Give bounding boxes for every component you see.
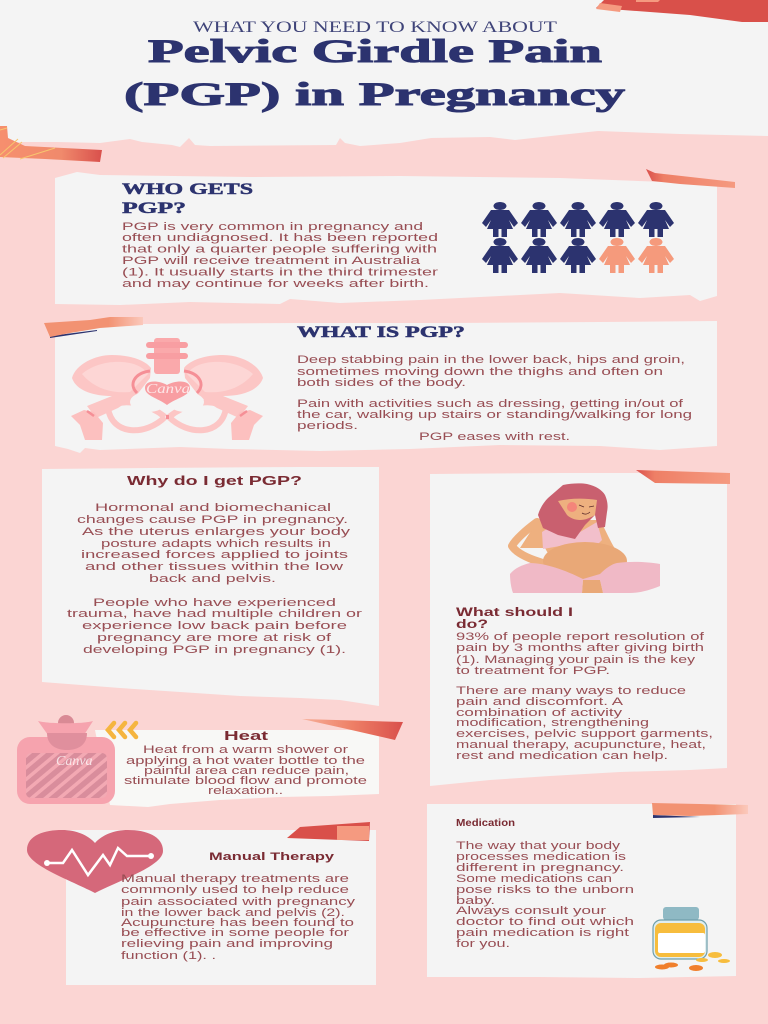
icon: heart <box>27 830 163 893</box>
tape: left <box>0 126 102 162</box>
heading: Why do I get PGP? <box>127 474 302 488</box>
text block <box>124 744 367 797</box>
text block: and may continue for weeks after birth. <box>122 278 429 290</box>
title <box>124 34 626 113</box>
text block: often undiagnosed. It has been reported <box>122 232 438 244</box>
text block: exercises, pelvic support garments, <box>456 728 713 740</box>
text block: The way that your body <box>456 840 621 852</box>
text block: commonly used to help reduce <box>121 884 349 896</box>
text block: Deep stabbing pain in the lower back, hips and groin, <box>297 354 685 366</box>
text block: painful area can reduce pain, <box>144 765 349 777</box>
heading: do? <box>456 619 488 631</box>
subtitle: WHAT YOU NEED TO KNOW ABOUT <box>193 19 557 36</box>
panel: manual therapy <box>27 822 376 985</box>
text block <box>122 221 439 290</box>
text block: pain associated with pregnancy <box>121 896 356 908</box>
heading: What should I <box>456 607 573 619</box>
text block: different in pregnancy. <box>456 862 624 874</box>
text block: stimulate blood flow and promote <box>124 775 367 787</box>
panel: what is PGP <box>44 317 717 453</box>
heading <box>122 181 253 217</box>
title: Pelvic Girdle Pain <box>148 34 602 70</box>
text block: be effective in some people for <box>121 927 350 939</box>
text block: doctor to find out which <box>456 916 634 928</box>
text block: Pain with activities such as dressing, getting in/out of <box>297 398 685 410</box>
text block: PGP eases with rest. <box>419 431 570 443</box>
text block: for you. <box>456 938 510 950</box>
text block: experience low back pain before <box>82 620 347 632</box>
text block: manual therapy, acupuncture, heat, <box>456 739 706 751</box>
tape <box>636 470 730 484</box>
tape <box>287 822 370 841</box>
heading: WHAT IS PGP? <box>297 324 465 341</box>
text block: periods. <box>297 420 358 432</box>
icon: hot water bottle <box>17 715 115 804</box>
text block: combination of activity <box>456 707 623 719</box>
heading: WHO GETS <box>122 181 253 198</box>
text block: posture adapts which results in <box>101 538 331 550</box>
text block: As the uterus enlarges your body <box>82 526 351 538</box>
text block: applying a hot water bottle to the <box>126 755 365 767</box>
heading <box>456 607 573 631</box>
text block: trauma, have had multiple children or <box>67 608 363 620</box>
icon: pill jar <box>653 907 730 971</box>
text block: developing PGP in pregnancy (1). <box>83 644 346 656</box>
text block: 93% of people report resolution of <box>456 631 706 643</box>
text block: back and pelvis. <box>149 573 276 585</box>
text block: increased forces applied to joints <box>81 549 349 561</box>
text block: (1). Managing your pain is the key <box>456 654 696 666</box>
text block: function (1). . <box>121 950 216 962</box>
text block: pain and discomfort. A <box>456 696 624 708</box>
text block: Heat from a warm shower or <box>143 744 349 756</box>
text block: and other tissues within the low <box>85 561 343 573</box>
text block: Always consult your <box>456 905 607 917</box>
panel: why do I get PGP <box>42 467 379 706</box>
text block: Hormonal and biomechanical <box>95 502 331 514</box>
panel: heat <box>17 715 403 807</box>
text block: sometimes moving down the thighs and often on <box>297 366 663 378</box>
text block: in the lower back and pelvis (2). <box>121 907 345 919</box>
tape <box>652 803 748 818</box>
text block: changes cause PGP in pregnancy. <box>77 514 348 526</box>
text block: pain by 3 months after giving birth <box>456 642 704 654</box>
icon: people chart <box>482 202 674 273</box>
heading: Heat <box>224 729 269 743</box>
text block: that only a quarter people suffering with <box>122 244 437 256</box>
text block <box>456 631 713 762</box>
text block: rest and medication can help. <box>456 750 668 762</box>
panel: what should I do <box>430 470 730 786</box>
text block: pose risks to the unborn <box>456 884 634 896</box>
text block: to treatment for PGP. <box>456 665 610 677</box>
tape <box>44 317 143 338</box>
text block: PGP will receive treatment in Australia <box>122 255 420 267</box>
heading: PGP? <box>122 200 186 217</box>
text block <box>67 502 363 656</box>
text block <box>121 873 356 962</box>
text block: relieving pain and improving <box>121 938 333 950</box>
text block: pain medication is right <box>456 927 629 939</box>
text block: There are many ways to reduce <box>456 685 686 697</box>
title: (PGP) in Pregnancy <box>124 77 626 113</box>
text block: relaxation.. <box>208 785 283 797</box>
heading: Manual Therapy <box>209 851 335 863</box>
text block: the car, walking up stairs or standing/walking for long <box>297 409 692 421</box>
text block: processes medication is <box>456 851 627 863</box>
text block: Manual therapy treatments are <box>121 873 349 885</box>
tape: top right <box>596 0 768 22</box>
text block <box>456 840 634 950</box>
icon: pelvis <box>71 338 263 440</box>
text block: pregnancy are more at risk of <box>97 632 333 644</box>
illustration: pregnant woman <box>510 483 660 593</box>
text block: PGP is very common in pregnancy and <box>122 221 423 233</box>
watermark: Canva <box>56 754 93 769</box>
heading: Medication <box>456 818 515 829</box>
text block: both sides of the body. <box>297 377 466 389</box>
panel: who gets PGP <box>55 169 735 305</box>
tape <box>646 169 735 188</box>
text block: (1). It usually starts in the third trimester <box>122 266 439 278</box>
text block: People who have experienced <box>93 597 336 609</box>
icon: heat chevrons <box>108 723 136 737</box>
panel: medication <box>427 803 748 978</box>
watermark: Canva <box>146 382 190 397</box>
text block <box>297 354 692 443</box>
text block: Acupuncture has been found to <box>121 917 354 929</box>
header panel <box>0 0 768 147</box>
text block: Some medications can <box>456 873 612 885</box>
text block: modification, strengthening <box>456 717 649 729</box>
tape <box>302 719 403 740</box>
text block: baby. <box>456 895 495 907</box>
